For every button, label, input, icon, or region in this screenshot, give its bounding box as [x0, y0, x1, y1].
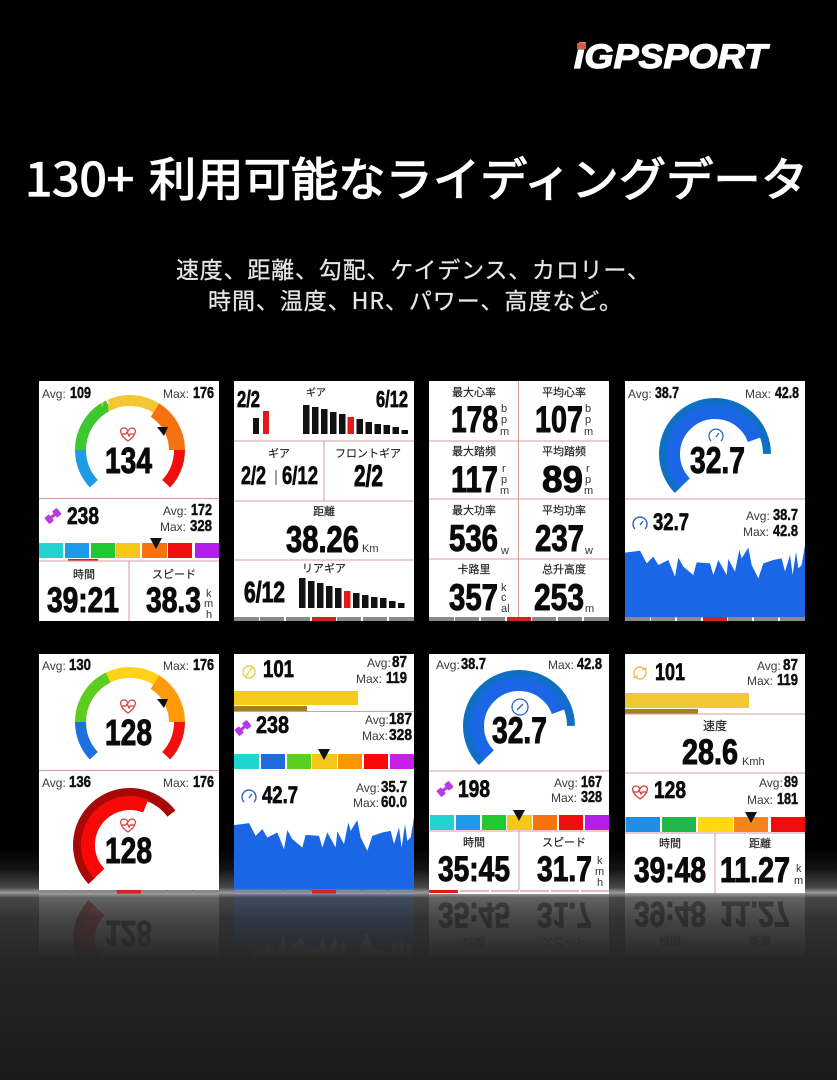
- power average and maximum: Max:: [160, 520, 186, 534]
- speed field: Kmh: [742, 756, 765, 768]
- power average and maximum: [362, 711, 412, 744]
- average heart rate: 109: [70, 385, 91, 402]
- average heart rate field: 平均心率: [542, 385, 586, 399]
- cadence average and maximum: Max:: [356, 672, 382, 686]
- speed average and maximum: Max:: [743, 525, 769, 539]
- speed field: スピード: [152, 568, 196, 581]
- cadence average and maximum: 119: [386, 670, 407, 687]
- average heart rate field: m: [584, 426, 593, 438]
- floor reflection of lower panels: 11.27: [720, 894, 790, 933]
- speed area chart: [625, 545, 805, 617]
- maximum power field: 536: [449, 518, 498, 559]
- speed average and maximum: 60.0: [381, 794, 407, 811]
- floor reflection of lower panels: 時間: [463, 935, 485, 948]
- average and maximum speed: 38.7: [655, 385, 679, 402]
- average cadence field: 平均踏频: [542, 444, 586, 458]
- average and maximum speed: [628, 385, 799, 402]
- subtitle: [176, 251, 650, 316]
- rear gear field: 6/12: [244, 577, 285, 609]
- average heart rate field: b: [585, 403, 591, 415]
- icon: speedometer: [709, 429, 723, 441]
- floor reflection of lower panels: 35:45: [438, 895, 510, 934]
- icon: heart: [121, 428, 135, 441]
- average and maximum speed: Max:: [548, 658, 574, 672]
- speed average and maximum: [743, 507, 798, 540]
- average heart rate: Avg:: [42, 387, 66, 401]
- average and maximum speed: [436, 656, 602, 673]
- speed field: 28.6: [682, 733, 738, 772]
- icon: power: [436, 781, 454, 797]
- calories field: 357: [449, 577, 498, 618]
- average power field: [535, 503, 593, 559]
- maximum heart rate: Max:: [163, 387, 189, 401]
- average and maximum heart rate: Avg:: [42, 659, 66, 673]
- power average and maximum: [160, 502, 212, 535]
- floor reflection of lower panels: 距離: [749, 934, 771, 948]
- speed field: 速度: [703, 719, 727, 733]
- average cadence field: 89: [542, 459, 583, 500]
- maximum cadence field: p: [501, 474, 507, 486]
- cadence average and maximum: 87: [392, 654, 407, 671]
- maximum heart rate: [163, 385, 214, 402]
- panel: speed gauge, power, time and speed: [429, 652, 609, 894]
- combined gear field: ギア: [268, 447, 290, 460]
- speed field: h: [206, 609, 212, 621]
- power zone bar: [234, 749, 414, 769]
- average heart rate: [42, 385, 91, 402]
- cadence average and maximum: Avg:: [367, 656, 391, 670]
- total ascent field: 总升高度: [542, 562, 586, 576]
- distance field: m: [794, 875, 803, 887]
- power value: 238: [67, 503, 99, 530]
- maximum heart rate: 176: [193, 385, 214, 402]
- distance field: 距離: [749, 836, 771, 850]
- combined gear field: 6/12: [282, 462, 318, 490]
- cadence bars: [625, 693, 749, 714]
- distance field: 38.26: [286, 519, 359, 560]
- average and maximum heart rate second: Max:: [163, 776, 189, 790]
- average power field: 237: [535, 518, 584, 559]
- speed gauge: [445, 652, 593, 800]
- floor reflection of lower panels: 39:48: [634, 894, 706, 933]
- average and maximum speed: 38.7: [461, 656, 486, 673]
- time field: [47, 568, 119, 620]
- calories field: al: [501, 603, 510, 615]
- average and maximum heart rate: 176: [193, 657, 214, 674]
- distance field: Km: [362, 543, 378, 555]
- heart rate average and maximum: 89: [784, 774, 798, 791]
- maximum heart rate field: 178: [451, 399, 498, 440]
- page tabs: [234, 890, 414, 894]
- average and maximum speed: Avg:: [436, 658, 460, 672]
- icon: heart: [121, 700, 135, 713]
- cadence average and maximum: [747, 657, 798, 689]
- panel: heart rate gauge, power, time and speed: [39, 380, 219, 621]
- page tabs: [234, 617, 414, 621]
- time field: 39:21: [47, 581, 119, 620]
- icon: speedometer: [512, 699, 528, 715]
- icon: speedometer small: [633, 517, 647, 529]
- heart rate value: 128: [105, 830, 152, 871]
- heart rate average and maximum: Avg:: [759, 776, 783, 790]
- page tabs: [39, 890, 219, 894]
- total ascent field: 253: [534, 577, 584, 618]
- calories field: c: [501, 592, 507, 604]
- speed value: 42.7: [262, 782, 298, 809]
- front gear field: フロントギア: [335, 447, 401, 460]
- power average and maximum: 167: [581, 774, 602, 791]
- maximum heart rate field: m: [500, 426, 509, 438]
- power average and maximum: Avg:: [365, 713, 389, 727]
- power average and maximum: 328: [190, 518, 212, 535]
- average cadence field: p: [585, 474, 591, 486]
- calories field: 卡路里: [458, 563, 490, 576]
- speed value: 32.7: [690, 440, 745, 481]
- cadence bars: [234, 691, 358, 711]
- red gauge: [57, 772, 203, 918]
- heart rate value: 134: [105, 440, 152, 481]
- average heart rate field: p: [585, 414, 591, 426]
- speed average and maximum: Avg:: [746, 509, 770, 523]
- subtitle: 速度、距離、勾配、ケイデンス、カロリー、: [176, 251, 650, 285]
- power value: 238: [256, 712, 289, 739]
- speed field: [682, 719, 765, 772]
- power average and maximum: 172: [191, 502, 212, 519]
- rear gear indicator: 6/12: [376, 386, 408, 412]
- floor reflection of lower panels: [39, 893, 805, 943]
- power zone bar: [430, 810, 609, 830]
- average power field: 平均功率: [542, 503, 586, 517]
- heart rate zone bar: [626, 812, 805, 832]
- subtitle: 時間、温度、HR、パワー、高度など。: [208, 282, 622, 316]
- panel: cadence, power and speed chart: [234, 654, 414, 894]
- rear gear indicator: [303, 386, 408, 434]
- maximum cadence field: m: [500, 485, 509, 497]
- icon: power: [234, 720, 252, 736]
- total ascent field: m: [585, 603, 594, 615]
- time field: 39:48: [634, 851, 706, 890]
- gauge marker: [157, 699, 168, 708]
- average and maximum heart rate: Max:: [163, 659, 189, 673]
- page tabs: [429, 890, 609, 893]
- power average and maximum: 328: [581, 789, 602, 806]
- average and maximum heart rate second: [42, 774, 214, 791]
- speed field: h: [597, 877, 603, 889]
- logo: iGPSPORT: iGPSPORT: [574, 38, 771, 76]
- rear gear field: [244, 562, 404, 609]
- maximum cadence field: r: [502, 463, 506, 475]
- heart rate average and maximum: [747, 774, 798, 808]
- speed field: スピード: [542, 836, 586, 849]
- average and maximum speed: 42.8: [577, 656, 602, 673]
- average heart rate field: 107: [535, 399, 583, 440]
- front gear field: [335, 447, 401, 493]
- average and maximum heart rate: 130: [69, 657, 91, 674]
- speed average and maximum: 42.8: [773, 523, 798, 540]
- speed field: m: [595, 866, 604, 878]
- average and maximum speed: Avg:: [628, 387, 652, 401]
- cadence average and maximum: Max:: [747, 674, 773, 688]
- cadence average and maximum: 87: [783, 657, 798, 674]
- power average and maximum: Avg:: [554, 776, 578, 790]
- power average and maximum: [551, 774, 602, 806]
- speed field: 31.7: [537, 850, 592, 889]
- power average and maximum: Max:: [551, 791, 577, 805]
- heart rate gauge: [60, 380, 200, 520]
- power average and maximum: Avg:: [163, 504, 187, 518]
- maximum cadence field: 最大踏频: [452, 444, 496, 458]
- calories field: k: [501, 582, 507, 594]
- average power field: w: [584, 545, 593, 557]
- icon: cadence: [633, 667, 647, 679]
- maximum heart rate field: 最大心率: [452, 385, 496, 399]
- speed field: 38.3: [146, 581, 201, 620]
- time field: 時間: [463, 836, 485, 849]
- average cadence field: m: [584, 485, 593, 497]
- maximum cadence field: 117: [451, 459, 498, 500]
- speed average and maximum: 35.7: [381, 779, 407, 796]
- average and maximum heart rate second: 176: [193, 774, 214, 791]
- average and maximum heart rate second: 136: [69, 774, 91, 791]
- average and maximum heart rate: [42, 657, 214, 674]
- speed field: m: [204, 598, 213, 610]
- cadence average and maximum: 119: [777, 672, 798, 689]
- floor reflection of lower panels: 時間: [659, 934, 681, 947]
- floor reflection of lower panels: スピード: [542, 935, 586, 948]
- icon: heart: [633, 786, 647, 799]
- time field: [438, 836, 510, 889]
- time field: 時間: [73, 568, 95, 581]
- floor reflection of lower panels: 31.7: [537, 895, 592, 934]
- speed average and maximum: Max:: [353, 796, 379, 810]
- power average and maximum: Max:: [362, 729, 388, 743]
- time field: [634, 837, 706, 890]
- maximum heart rate field: b: [501, 403, 507, 415]
- panel: gear data: [234, 381, 414, 621]
- time field: 35:45: [438, 850, 510, 889]
- title: 130+: [25, 144, 134, 210]
- combined gear field: [241, 447, 318, 490]
- floor reflection of lower panels: 128: [105, 913, 152, 954]
- power value: 198: [458, 776, 490, 803]
- icon: power: [44, 508, 62, 524]
- distance field: 11.27: [720, 851, 790, 890]
- heart rate value: 128: [654, 777, 686, 804]
- maximum power field: 最大功率: [452, 503, 496, 517]
- front gear indicator: [237, 386, 269, 434]
- cadence value: 101: [263, 656, 294, 683]
- speed gauge: [641, 380, 789, 528]
- gauge marker: [157, 427, 168, 436]
- average and maximum heart rate second: Avg:: [42, 776, 66, 790]
- front gear indicator: 2/2: [237, 386, 260, 412]
- icon: heart: [121, 819, 135, 832]
- average and maximum speed: 42.8: [775, 385, 799, 402]
- distance field: 距離: [313, 504, 335, 518]
- distance field: k: [796, 863, 802, 875]
- panel: speed gauge and speed chart: [625, 380, 805, 621]
- cadence average and maximum: Avg:: [757, 659, 781, 673]
- gear heading: ギア: [306, 387, 326, 399]
- heart rate average and maximum: Max:: [747, 793, 773, 807]
- icon: speedometer: [242, 790, 256, 802]
- speed average and maximum: Avg:: [356, 781, 380, 795]
- cadence average and maximum: [356, 654, 407, 687]
- power average and maximum: 187: [389, 711, 412, 728]
- speed field: k: [206, 588, 212, 600]
- heart rate average and maximum: 181: [777, 791, 798, 808]
- rear gear field: リアギア: [302, 562, 346, 575]
- maximum heart rate field: p: [501, 414, 507, 426]
- cadence value: 101: [655, 659, 685, 686]
- speed average and maximum: 38.7: [773, 507, 798, 524]
- heart rate gauge: [60, 652, 200, 792]
- page tabs: [429, 617, 609, 621]
- icon: cadence: [243, 666, 255, 678]
- page tabs: [625, 617, 805, 621]
- heart rate value: 128: [105, 712, 152, 753]
- title: 利用可能なライディングデータ: [149, 144, 808, 210]
- speed area chart: [234, 817, 414, 890]
- panel: two heart rate gauges: [39, 652, 219, 918]
- speed average and maximum: [353, 779, 407, 811]
- panel: eight data fields: [429, 381, 609, 621]
- maximum power field: w: [500, 545, 509, 557]
- power zone bar: [39, 538, 219, 558]
- front gear field: 2/2: [354, 460, 383, 493]
- speed field: k: [597, 855, 603, 867]
- average and maximum speed: Max:: [745, 387, 771, 401]
- panel: cadence, speed, heart rate, time and distance: [625, 654, 805, 893]
- power average and maximum: 328: [389, 727, 412, 744]
- speed value small: 32.7: [653, 509, 689, 536]
- time field: 時間: [659, 837, 681, 850]
- speed value: 32.7: [492, 710, 547, 751]
- average cadence field: r: [586, 463, 590, 475]
- average cadence field: [542, 444, 593, 500]
- combined gear field: 2/2: [241, 462, 266, 490]
